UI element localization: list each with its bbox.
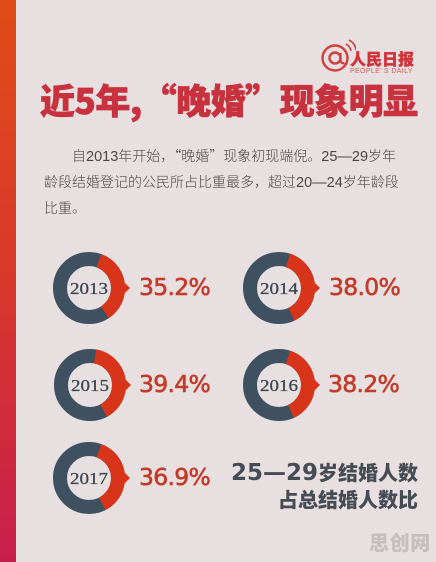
value 2015: 39.4% [139,370,210,398]
donut 2013: 2013 [70,279,108,298]
donut 2016: 2016 [260,376,298,395]
donut 2013 [53,252,130,324]
logo English text: PEOPLE’ S DAILY [350,68,413,75]
watermark: 思创网 [369,527,431,556]
title: 近5年,“晚婚”现象明显 [40,74,418,125]
value 2013: 35.2% [139,273,210,301]
donut 2015 [54,349,131,421]
value 2014: 38.0% [329,273,400,301]
left gradient bar [0,0,16,562]
donut 2017 [53,442,130,514]
intro text: 自2013年开始，“晚婚”现象初现端倪。25—29岁年 [72,146,396,166]
logo wordmark: 人民日报 [350,46,414,70]
donut 2014: 2014 [260,279,299,298]
legend caption: 25—29岁结婚人数 [231,457,418,486]
donut 2017: 2017 [70,469,109,488]
value 2016: 38.2% [328,370,399,398]
intro text: 比重。 [44,198,86,218]
legend caption: 占总结婚人数比 [278,484,418,513]
intro text [44,146,399,218]
value 2017: 36.9% [139,463,210,491]
intro text: 龄段结婚登记的公民所占比重最多，超过20—24岁年龄段 [44,172,399,192]
donut 2014 [243,252,320,324]
donut 2015: 2015 [71,376,109,395]
legend caption [231,457,418,513]
icon: at sign with signal arcs [321,39,356,72]
donut 2016 [243,349,320,421]
logo: People's Daily [321,39,414,75]
